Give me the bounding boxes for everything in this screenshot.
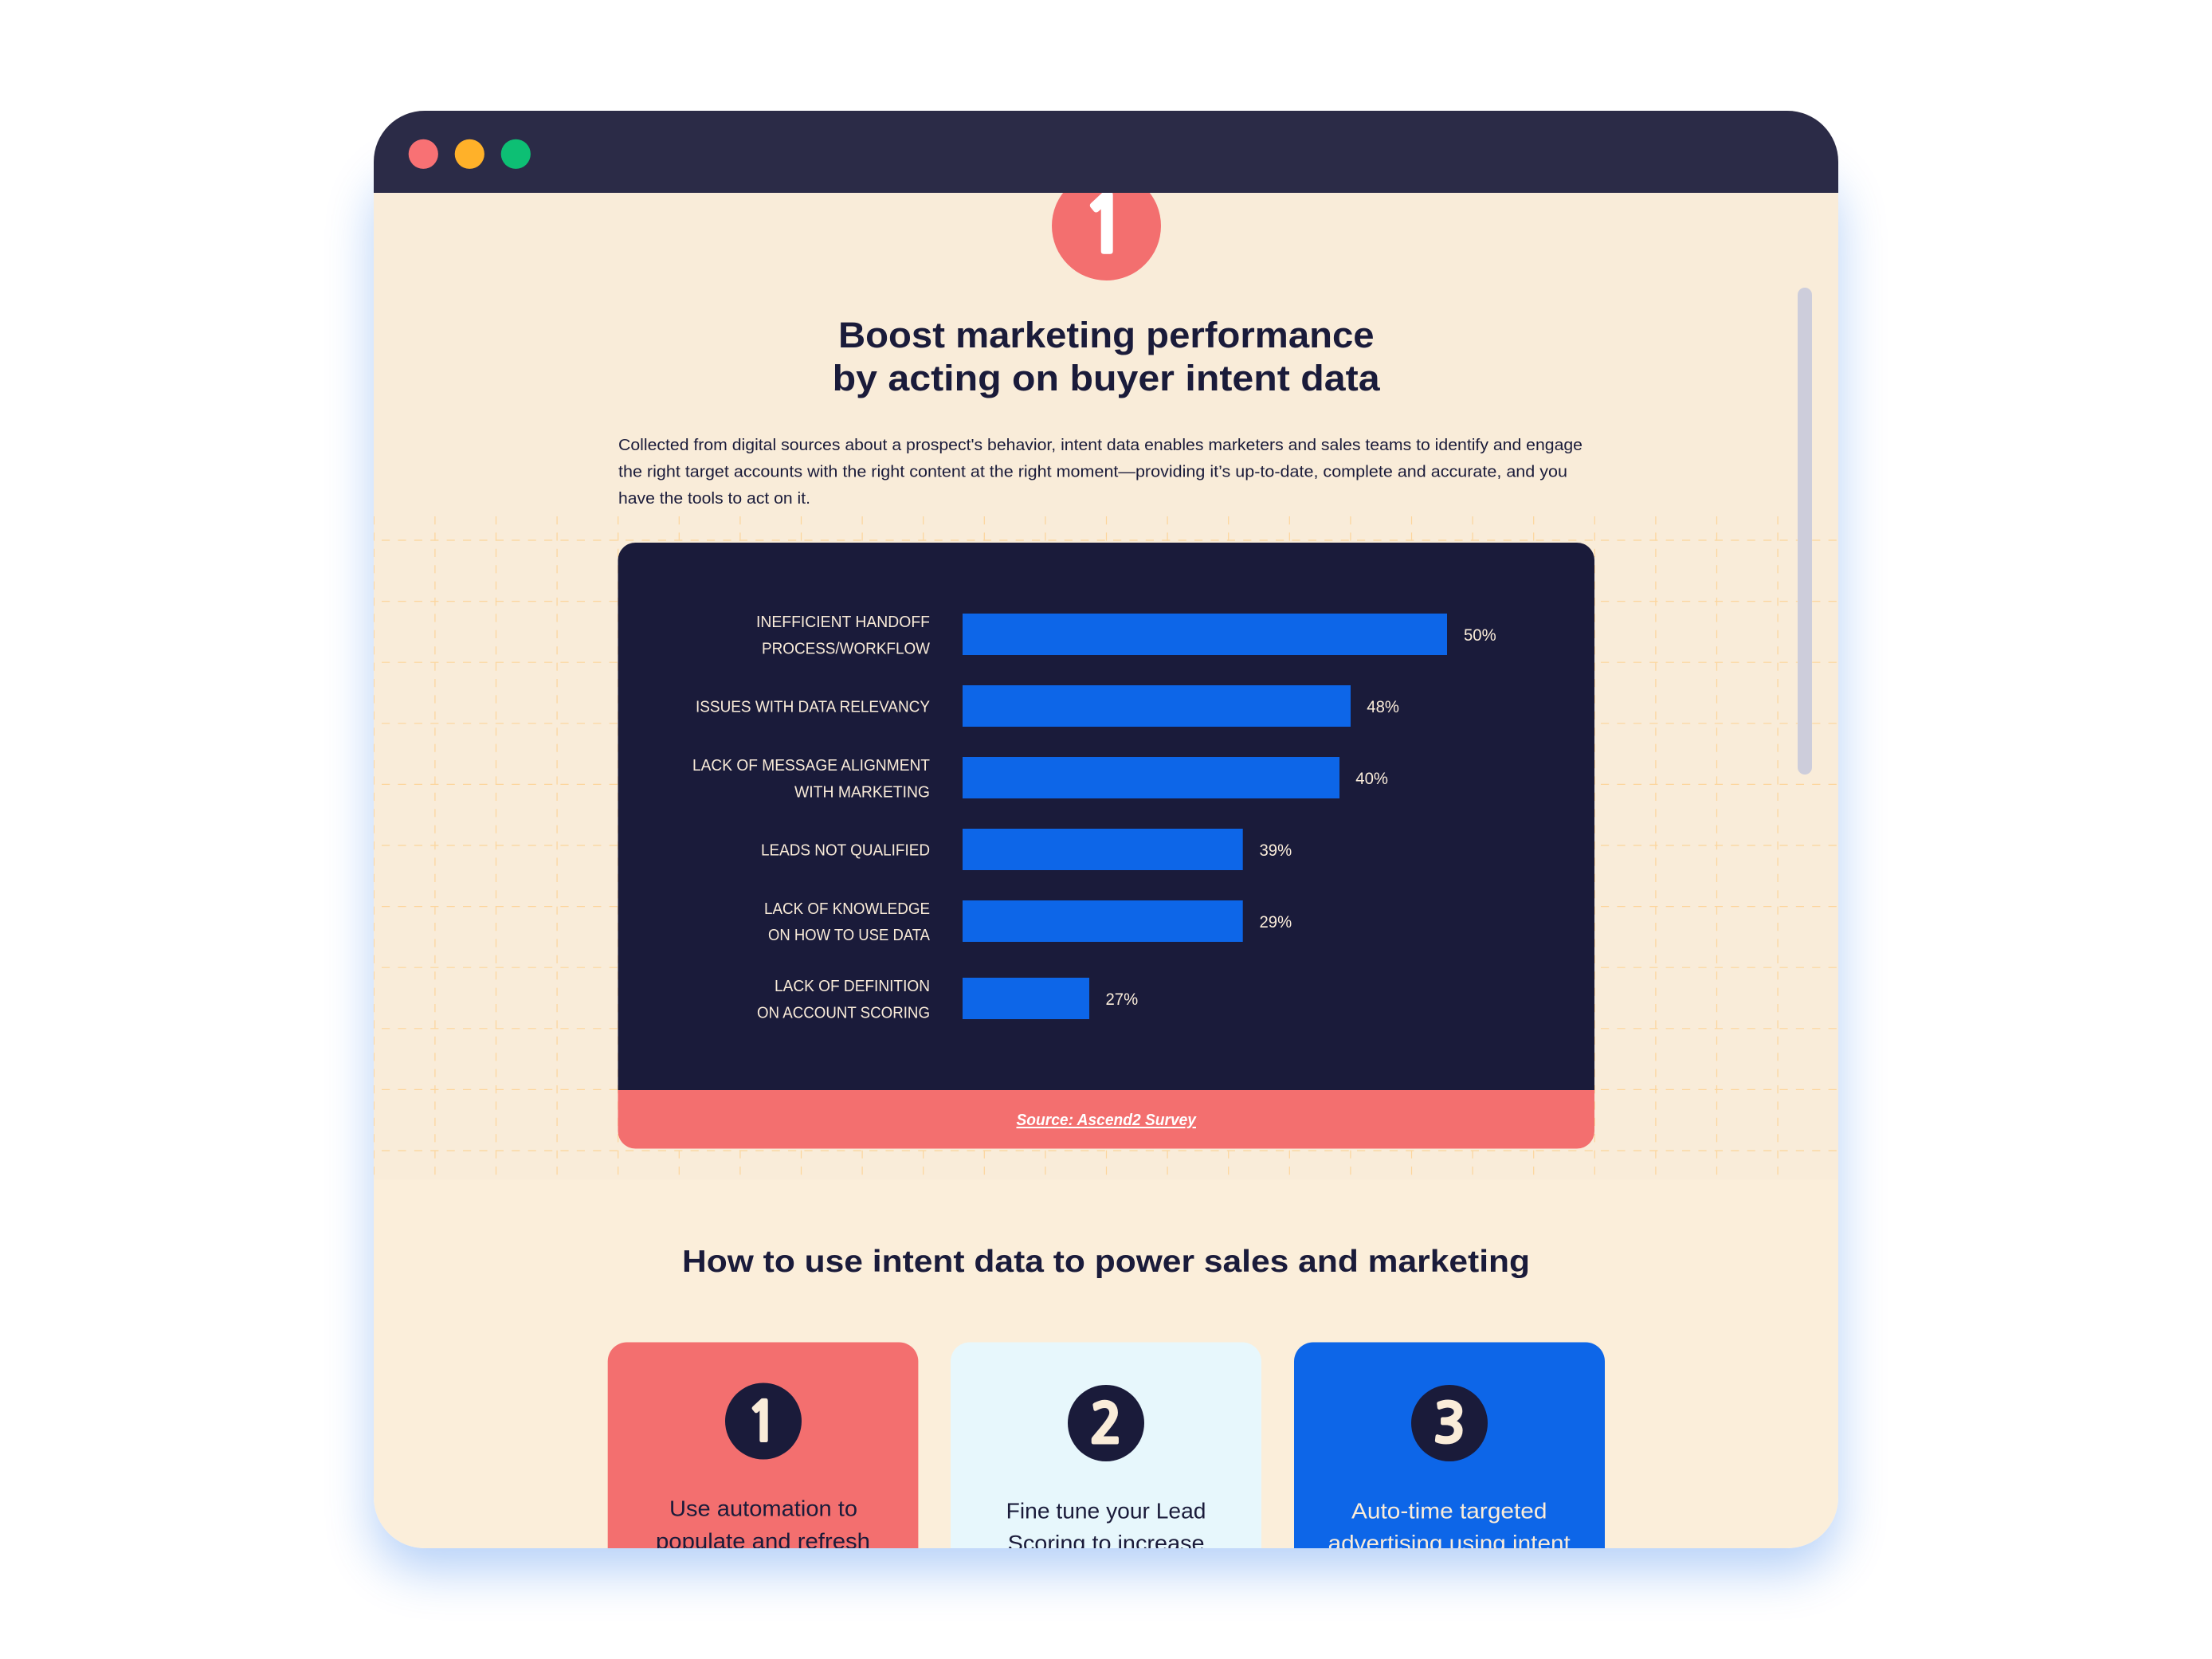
card 3 number (1411, 1385, 1488, 1461)
source strip: Source: Ascend2 Survey (1017, 1111, 1197, 1129)
section number badge (1052, 193, 1161, 280)
bar category labels: WITH MARKETING (794, 782, 930, 801)
intro paragraph: the right target accounts with the right content at the right moment—providing it’s up-to-date, complete and accurate, and you (618, 463, 1567, 481)
card 2 text (1007, 1503, 1205, 1548)
card 2 text: Scoring to increase (1008, 1531, 1205, 1555)
bar value labels: 29% (1259, 913, 1292, 931)
bar value labels (1106, 626, 1496, 1009)
card 1 number (725, 1383, 802, 1460)
bar category labels (692, 613, 931, 1022)
bar value labels: 39% (1259, 841, 1292, 860)
heading (833, 315, 1381, 398)
card 2 text: Fine tune your Lead (1006, 1498, 1206, 1523)
card 1 text: populate and refresh (656, 1528, 870, 1553)
bar category labels: ON HOW TO USE DATA (768, 926, 930, 944)
intro paragraph: Collected from digital sources about a prospect's behavior, intent data enables marketers and sales teams to identify and engage (618, 436, 1583, 454)
title bar (374, 111, 1838, 193)
bar value labels: 50% (1464, 626, 1496, 645)
bar category labels: LEADS NOT QUALIFIED (761, 841, 930, 860)
browser window illustration (374, 111, 1838, 1548)
intro paragraph (618, 436, 1583, 508)
icon: yellow window dot (455, 139, 484, 169)
bar category labels: LACK OF MESSAGE ALIGNMENT (692, 756, 930, 775)
icon: green window dot (501, 139, 531, 169)
window shadow (374, 151, 1838, 1548)
card 3 text: Auto-time targeted (1351, 1498, 1547, 1523)
card 3 (1294, 1342, 1605, 1548)
card 3 text (1329, 1503, 1570, 1548)
heading: by acting on buyer intent data (833, 358, 1381, 398)
source strip (618, 1090, 1594, 1149)
scrollbar (1798, 288, 1812, 775)
subheading: How to use intent data to power sales and marketing (682, 1245, 1530, 1279)
card 1 text (657, 1500, 869, 1548)
bar category labels: ISSUES WITH DATA RELEVANCY (696, 697, 930, 716)
bar category labels: LACK OF KNOWLEDGE (764, 900, 930, 918)
card 2 (951, 1342, 1261, 1548)
bar category labels: PROCESS/WORKFLOW (762, 639, 931, 657)
intro paragraph: have the tools to act on it. (618, 489, 810, 508)
card 1 number: 1 (746, 1396, 779, 1450)
bar category labels: ON ACCOUNT SCORING (757, 1003, 930, 1022)
card 2 number (1068, 1385, 1144, 1461)
card 1 text: Use automation to (669, 1496, 857, 1521)
bar chart bars (963, 614, 1447, 1019)
panel: bar chart (618, 543, 1594, 1149)
bar value labels: 48% (1367, 698, 1399, 716)
card 2 number: 2 (1089, 1398, 1123, 1452)
bar value labels: 27% (1106, 990, 1138, 1009)
card 3 text: advertising using intent (1328, 1531, 1571, 1555)
card 3 number: 3 (1433, 1398, 1466, 1452)
bar category labels: LACK OF DEFINITION (775, 977, 930, 995)
card 1 (607, 1342, 918, 1548)
section number badge: 1 (1082, 187, 1128, 264)
bar category labels: INEFFICIENT HANDOFF (756, 613, 930, 631)
icon: red window dot (409, 139, 438, 169)
heading: Boost marketing performance (838, 315, 1375, 355)
bar value labels: 40% (1355, 770, 1388, 788)
